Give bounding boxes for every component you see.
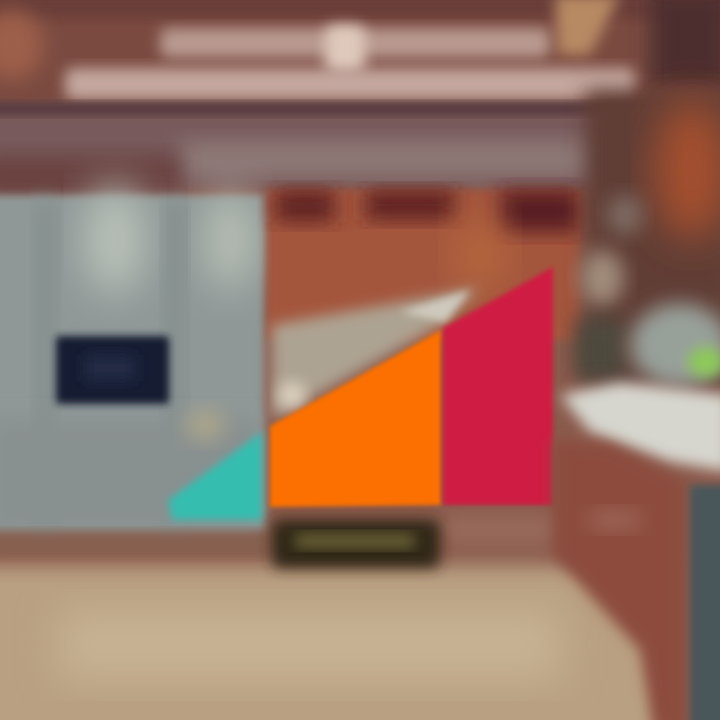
chart: crimson segment — [443, 267, 553, 505]
header wall background — [0, 0, 720, 110]
title text block, blurred — [65, 25, 635, 100]
brick column lower right — [553, 440, 685, 720]
icon: green accent — [688, 347, 720, 377]
chart shadow area: pale grey wedge above bars — [272, 288, 480, 420]
floor — [0, 515, 660, 720]
panel: left grey wall — [0, 185, 264, 532]
panel: right side wall — [575, 90, 720, 390]
dark screen on wall — [56, 336, 169, 404]
grey column far right — [690, 485, 720, 720]
white counter — [560, 382, 720, 472]
panel: central brick wall — [268, 190, 583, 340]
dark label strip under chart — [272, 520, 440, 568]
chart: orange segment — [270, 330, 441, 507]
chart: teal segment — [168, 432, 262, 520]
ceiling band — [0, 102, 650, 197]
